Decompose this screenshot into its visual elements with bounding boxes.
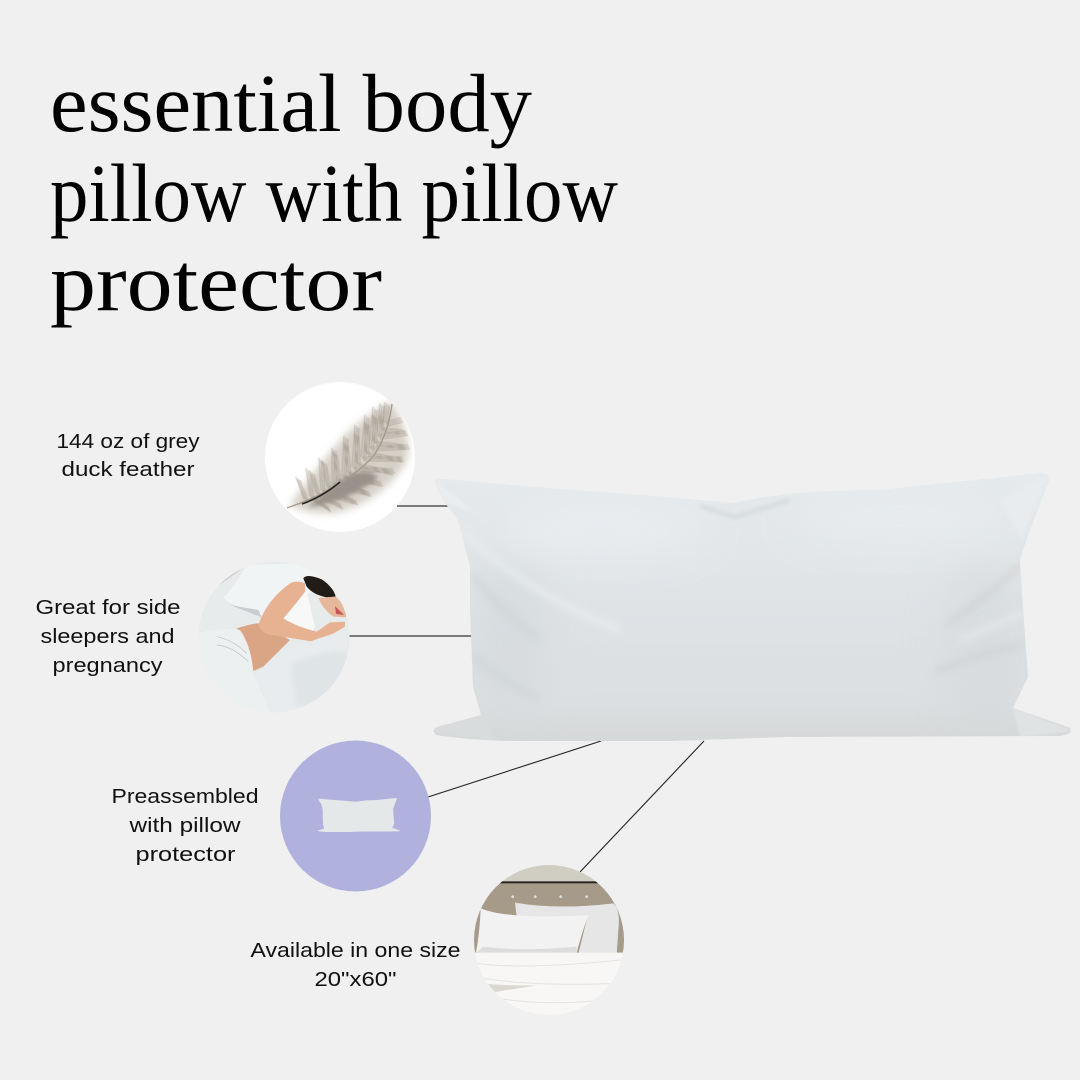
label: feather: duck feather xyxy=(62,458,195,481)
leader line: side sleeper to pillow xyxy=(349,635,472,637)
leader line: protector to pillow xyxy=(428,741,601,797)
mini pillow xyxy=(318,798,400,832)
icon: pillow on lavender circle xyxy=(280,740,431,892)
label: size: 20"x60" xyxy=(314,968,396,991)
title: pillow with pillow xyxy=(50,147,618,239)
label: size xyxy=(250,939,460,991)
label: side sleepers: pregnancy xyxy=(52,654,163,677)
leader line: size to pillow xyxy=(580,741,704,872)
icon: feather photo circle xyxy=(265,382,415,532)
label: feather: 144 oz of grey xyxy=(56,430,200,453)
title: protector xyxy=(50,236,382,328)
label: side sleepers xyxy=(36,596,180,677)
label: protector: protector xyxy=(136,843,236,866)
icon: pregnant side sleeper photo circle xyxy=(216,568,350,710)
label: feather xyxy=(56,430,200,481)
title xyxy=(50,57,618,328)
main pillow photo xyxy=(432,473,1072,741)
feather barbs xyxy=(296,402,410,512)
icon: bed with pillows photo circle xyxy=(474,865,624,1003)
label: size: Available in one size xyxy=(250,939,460,962)
label: protector: Preassembled xyxy=(112,785,258,808)
leader line: feather to pillow xyxy=(397,505,450,507)
feather soft plume xyxy=(290,402,408,513)
label: side sleepers: Great for side xyxy=(36,596,180,619)
label: protector: with pillow xyxy=(128,814,241,837)
label: protector xyxy=(112,785,258,866)
label: side sleepers: sleepers and xyxy=(40,625,174,648)
title: essential body xyxy=(50,57,532,149)
